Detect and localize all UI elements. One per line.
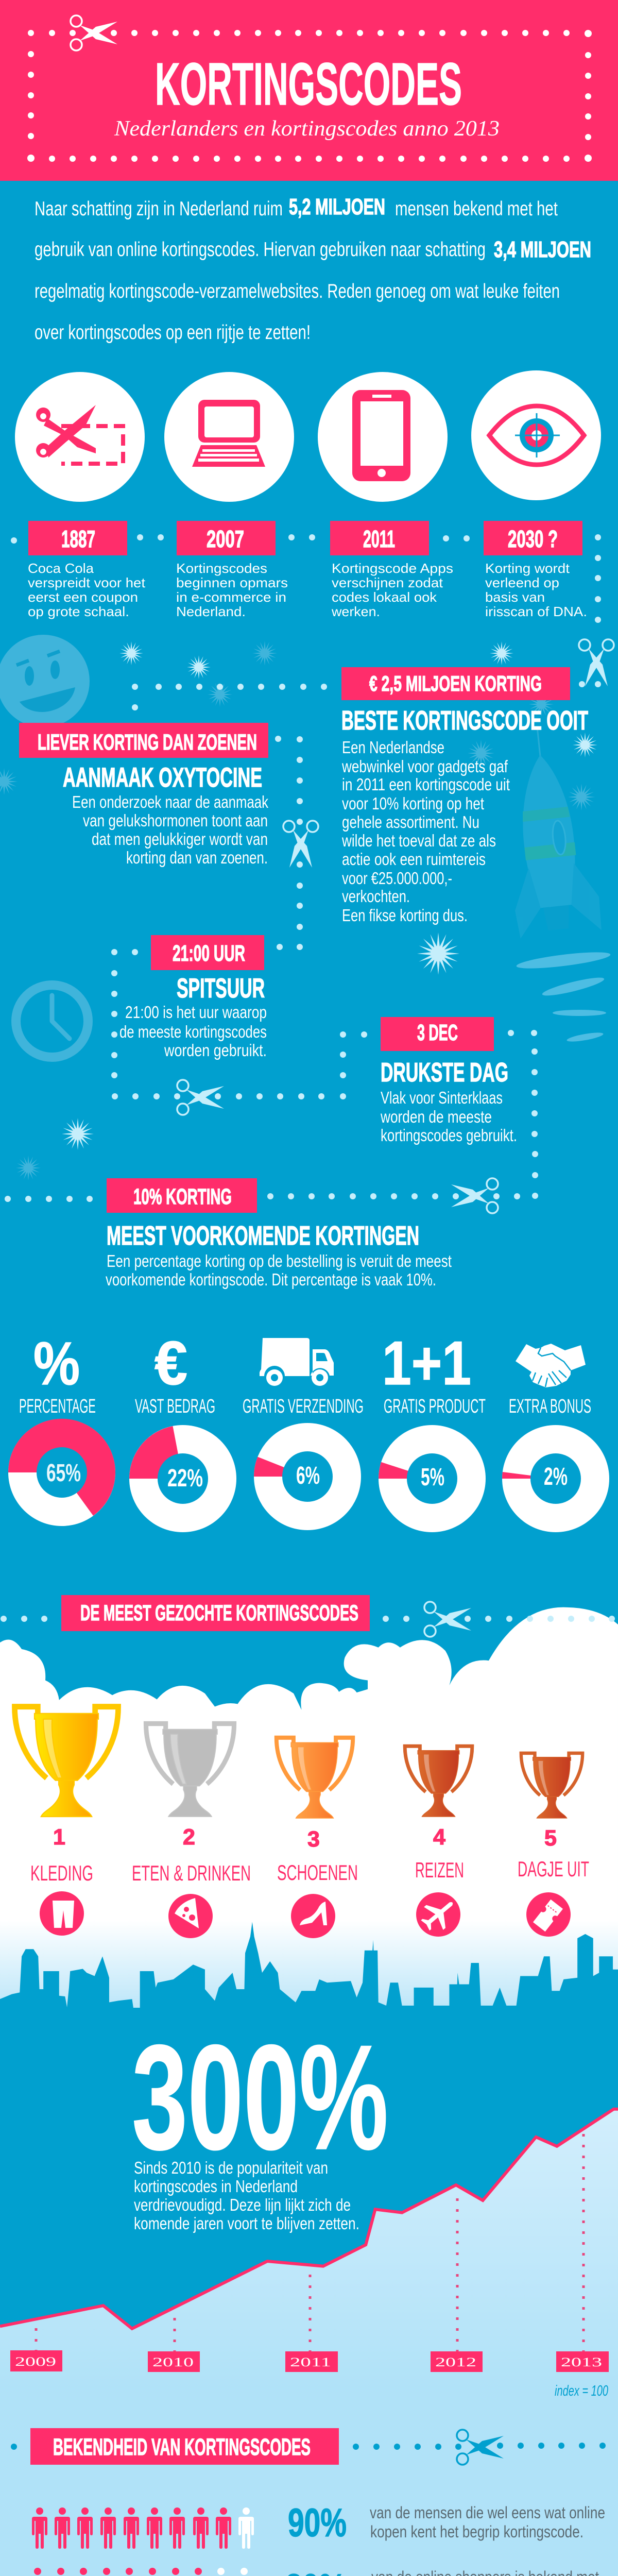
panel: beste kortingscode ooit: wilde het toeval dat ze als — [341, 831, 496, 850]
popularity text: Sinds 2010 is de populariteit van — [134, 2158, 328, 2177]
milestone: 1887 — [28, 521, 146, 619]
panel: beste kortingscode ooit: voor €25.000.000,- — [342, 869, 452, 888]
panel: meest voorkomende kortingen: voorkomende kortingscode. Dit percentage is vaak 10%. — [106, 1270, 436, 1289]
ranking 5: dagje uit: 5 — [544, 1826, 557, 1851]
donut chart: 5%: 5% — [421, 1464, 444, 1491]
ranking 4: reizen: 4 — [433, 1825, 445, 1850]
decorative: rocket exhaust — [516, 949, 611, 1043]
chart year labels: 2012 — [435, 2355, 476, 2369]
donut chart: 22% — [129, 1425, 236, 1532]
milestone: 2030: basis van — [485, 589, 545, 605]
milestone: 2007: in e-commerce in — [176, 589, 286, 605]
icon: laptop circle — [164, 372, 294, 502]
icon: truck — [260, 1338, 334, 1386]
ranking 1: kleding — [14, 1707, 118, 1936]
intro text: 5,2 MILJOEN — [289, 194, 385, 219]
decorative: clock — [16, 985, 88, 1057]
panel: aanmaak oxytocine: korting dan van zoenen. — [126, 848, 268, 867]
panel: spitsuur: 21:00 UUR — [173, 941, 245, 966]
milestone: 2011: verschijnen zodat — [332, 575, 443, 590]
ranking 1: kleding: 1 — [53, 1825, 65, 1850]
big number 300% — [132, 2014, 388, 2233]
chart dotted drop lines — [36, 2134, 583, 2351]
dotted path: bekendheid — [11, 2443, 606, 2450]
icon: one plus one: 1+1 — [382, 1329, 471, 1398]
ranking 3: schoenen: 3 — [307, 1827, 320, 1852]
milestone: 2030: 2030 ? — [508, 526, 558, 552]
panel: spitsuur: SPITSUUR — [177, 973, 265, 1004]
panel: spitsuur: 21:00 is het uur waarop — [125, 1003, 267, 1022]
icon: handshake — [516, 1344, 586, 1387]
panel: beste kortingscode ooit: verkochten. — [342, 887, 410, 906]
icon: scissors and coupon circle — [15, 372, 145, 502]
panel: aanmaak oxytocine — [19, 723, 268, 867]
category labels: GRATIS VERZENDING — [243, 1396, 364, 1417]
donut chart: 2% — [502, 1425, 609, 1532]
milestone: 1887: op grote schaal. — [28, 604, 129, 619]
panel: drukste dag: kortingscodes gebruikt. — [381, 1126, 517, 1145]
panel: meest voorkomende kortingen — [106, 1178, 452, 1289]
panel: drukste dag — [380, 1017, 517, 1145]
decorative: smiley — [0, 635, 90, 727]
decorative: rocket — [496, 725, 603, 939]
decorative: stars — [0, 641, 597, 1180]
icon: eye scan circle — [471, 370, 601, 500]
ranking 2: eten en drinken — [132, 1724, 251, 1938]
popularity text: verdrievoudigd. Deze lijn lijkt zich de — [134, 2195, 351, 2214]
milestone: 2011: Kortingscode Apps — [332, 561, 453, 576]
panel: aanmaak oxytocine: LIEVER KORTING DAN ZOENEN — [38, 730, 257, 755]
panel: aanmaak oxytocine: AANMAAK OXYTOCINE — [63, 762, 262, 793]
milestone: 2007: Kortingscodes — [176, 561, 267, 576]
milestone: 1887: eerst een coupon — [28, 589, 138, 605]
milestone: 2030: verleend op — [485, 575, 559, 590]
background: light blue lower panel — [0, 2389, 618, 2576]
icon: scissors horizontal — [177, 1080, 224, 1115]
donut chart: 2%: 2% — [544, 1463, 568, 1490]
pictogram row: 90% — [32, 2501, 605, 2549]
background: skyline — [0, 1922, 618, 2071]
panel: header — [0, 0, 618, 181]
intro text: mensen bekend met het — [395, 198, 558, 220]
panel: beste kortingscode ooit — [341, 667, 588, 925]
panel: spitsuur: de meeste kortingscodes — [119, 1022, 267, 1041]
icon: scissors mirrored — [451, 1178, 498, 1213]
panel: aanmaak oxytocine: dat men gelukkiger wordt van — [92, 829, 268, 849]
popularity text — [134, 2158, 359, 2233]
milestone: 2007 — [176, 521, 288, 619]
ranking 4: reizen — [405, 1746, 472, 1937]
chart year labels: 2011 — [290, 2355, 331, 2369]
panel: meest gezochte heading — [61, 1595, 370, 1631]
intro text: over kortingscodes op een rijtje te zetten! — [35, 321, 311, 344]
milestone: 2030 — [484, 521, 587, 619]
background: sky gradient — [0, 1920, 618, 2008]
milestone: 2007: Nederland. — [176, 604, 246, 619]
popularity text: komende jaren voort te blijven zetten. — [134, 2214, 359, 2233]
pictogram row: 90%: 90% — [288, 2501, 347, 2545]
milestone: 2007: beginnen opmars — [176, 575, 288, 590]
category labels — [19, 1396, 591, 1417]
subtitle: Nederlanders en kortingscodes anno 2013 — [114, 117, 500, 141]
line chart: trend — [0, 2109, 618, 2329]
line chart area — [0, 2109, 618, 2390]
donut chart: 65%: 65% — [46, 1460, 81, 1487]
icon: euro: € — [154, 1329, 187, 1398]
popularity text: kortingscodes in Nederland — [134, 2177, 298, 2196]
icon: scissors search heading — [424, 1602, 471, 1637]
icon: smartphone circle — [318, 372, 448, 502]
donut chart: 6%: 6% — [296, 1462, 320, 1489]
ranking 4: reizen: REIZEN — [415, 1858, 464, 1882]
milestone: 2030: Korting wordt — [485, 561, 570, 576]
intro text: gebruik van online kortingscodes. Hiervan gebruiken naar schatting — [35, 239, 486, 261]
milestone: 2011: werken. — [331, 604, 380, 619]
panel: meest gezochte heading: DE MEEST GEZOCHTE KORTINGSCODES — [80, 1601, 358, 1625]
ranking 2: eten en drinken: 2 — [183, 1825, 195, 1850]
milestone: 1887: verspreidt voor het — [28, 575, 146, 590]
panel: timeline — [11, 521, 601, 623]
donut chart: 6% — [254, 1423, 361, 1530]
panel: drukste dag: DRUKSTE DAG — [381, 1058, 508, 1088]
ranking 5: dagje uit — [518, 1753, 589, 1937]
panel: spitsuur: worden gebruikt. — [164, 1041, 267, 1060]
dotted border — [27, 30, 592, 162]
chart year labels: 2009 — [15, 2355, 56, 2369]
icon: scissors bekendheid — [457, 2430, 504, 2465]
panel: drukste dag: 3 DEC — [417, 1020, 458, 1045]
panel: beste kortingscode ooit: webwinkel voor gadgets gaf — [341, 757, 508, 776]
category labels: VAST BEDRAG — [135, 1396, 215, 1417]
milestone: 2011: 2011 — [363, 526, 395, 552]
ranking 1: kleding: KLEDING — [30, 1861, 93, 1885]
chart year labels — [10, 2350, 609, 2372]
icon: scissors vertical middle — [283, 821, 318, 868]
panel: meest voorkomende kortingen: Een percentage korting op de bestelling is veruit de meest — [107, 1251, 452, 1270]
category labels: GRATIS PRODUCT — [384, 1396, 486, 1417]
chart year labels: 2010 — [152, 2355, 194, 2369]
dotted path: search heading — [1, 1616, 615, 1622]
icon: scissors — [71, 15, 117, 50]
dotted path: facts connector — [5, 681, 601, 1202]
panel: meest voorkomende kortingen: MEEST VOORKOMENDE KORTINGEN — [107, 1221, 419, 1251]
panel: spitsuur — [119, 935, 267, 1060]
panel: beste kortingscode ooit: € 2,5 MILJOEN KORTING — [369, 671, 542, 696]
icon: percent: % — [33, 1330, 80, 1398]
icon: scissors vertical right — [579, 639, 614, 686]
milestone: 2007: 2007 — [207, 526, 244, 552]
panel: drukste dag: Vlak voor Sinterklaas — [381, 1088, 503, 1107]
pictogram row: 80% — [30, 2566, 599, 2576]
panel: beste kortingscode ooit: Een Nederlandse — [342, 738, 444, 757]
intro text — [35, 194, 591, 344]
intro text: Naar schatting zijn in Nederland ruim — [35, 198, 283, 220]
panel: beste kortingscode ooit: voor 10% korting op het — [342, 794, 484, 813]
panel: beste kortingscode ooit: in 2011 een kortingscode uit — [342, 775, 510, 794]
panel: meest voorkomende kortingen: 10% KORTING — [133, 1184, 232, 1209]
donut chart: 65% — [8, 1419, 115, 1526]
big number 300%: 300% — [132, 2014, 388, 2181]
panel: beste kortingscode ooit: actie ook een ruimtereis — [342, 850, 486, 869]
panel: beste kortingscode ooit: gehele assortiment. Nu — [342, 812, 479, 832]
background: clouds — [0, 1607, 618, 1927]
milestone: 2011: codes lokaal ook — [332, 589, 437, 605]
panel: aanmaak oxytocine: van gelukshormonen toont aan — [83, 811, 268, 830]
ranking 3: schoenen — [277, 1738, 358, 1938]
chart year labels: 2013 — [561, 2355, 602, 2369]
donut chart: 5% — [379, 1425, 486, 1532]
ranking 3: schoenen: SCHOENEN — [277, 1860, 358, 1885]
panel: aanmaak oxytocine: Een onderzoek naar de aanmaak — [72, 792, 268, 811]
milestone: 2011 — [330, 521, 453, 619]
milestone: 2030: irisscan of DNA. — [485, 604, 587, 619]
milestone: 1887: Coca Cola — [28, 561, 94, 576]
panel: beste kortingscode ooit: Een fikse korting dus. — [342, 906, 468, 925]
panel: drukste dag: worden de meeste — [380, 1107, 492, 1126]
panel: bekendheid heading: BEKENDHEID VAN KORTINGSCODES — [53, 2434, 311, 2460]
timeline dots — [11, 534, 601, 623]
milestone: 1887: 1887 — [61, 526, 95, 552]
donut chart: 22%: 22% — [167, 1465, 203, 1492]
category labels: PERCENTAGE — [19, 1396, 96, 1417]
panel: bekendheid heading — [30, 2428, 339, 2465]
ranking 2: eten en drinken: ETEN & DRINKEN — [132, 1861, 251, 1885]
